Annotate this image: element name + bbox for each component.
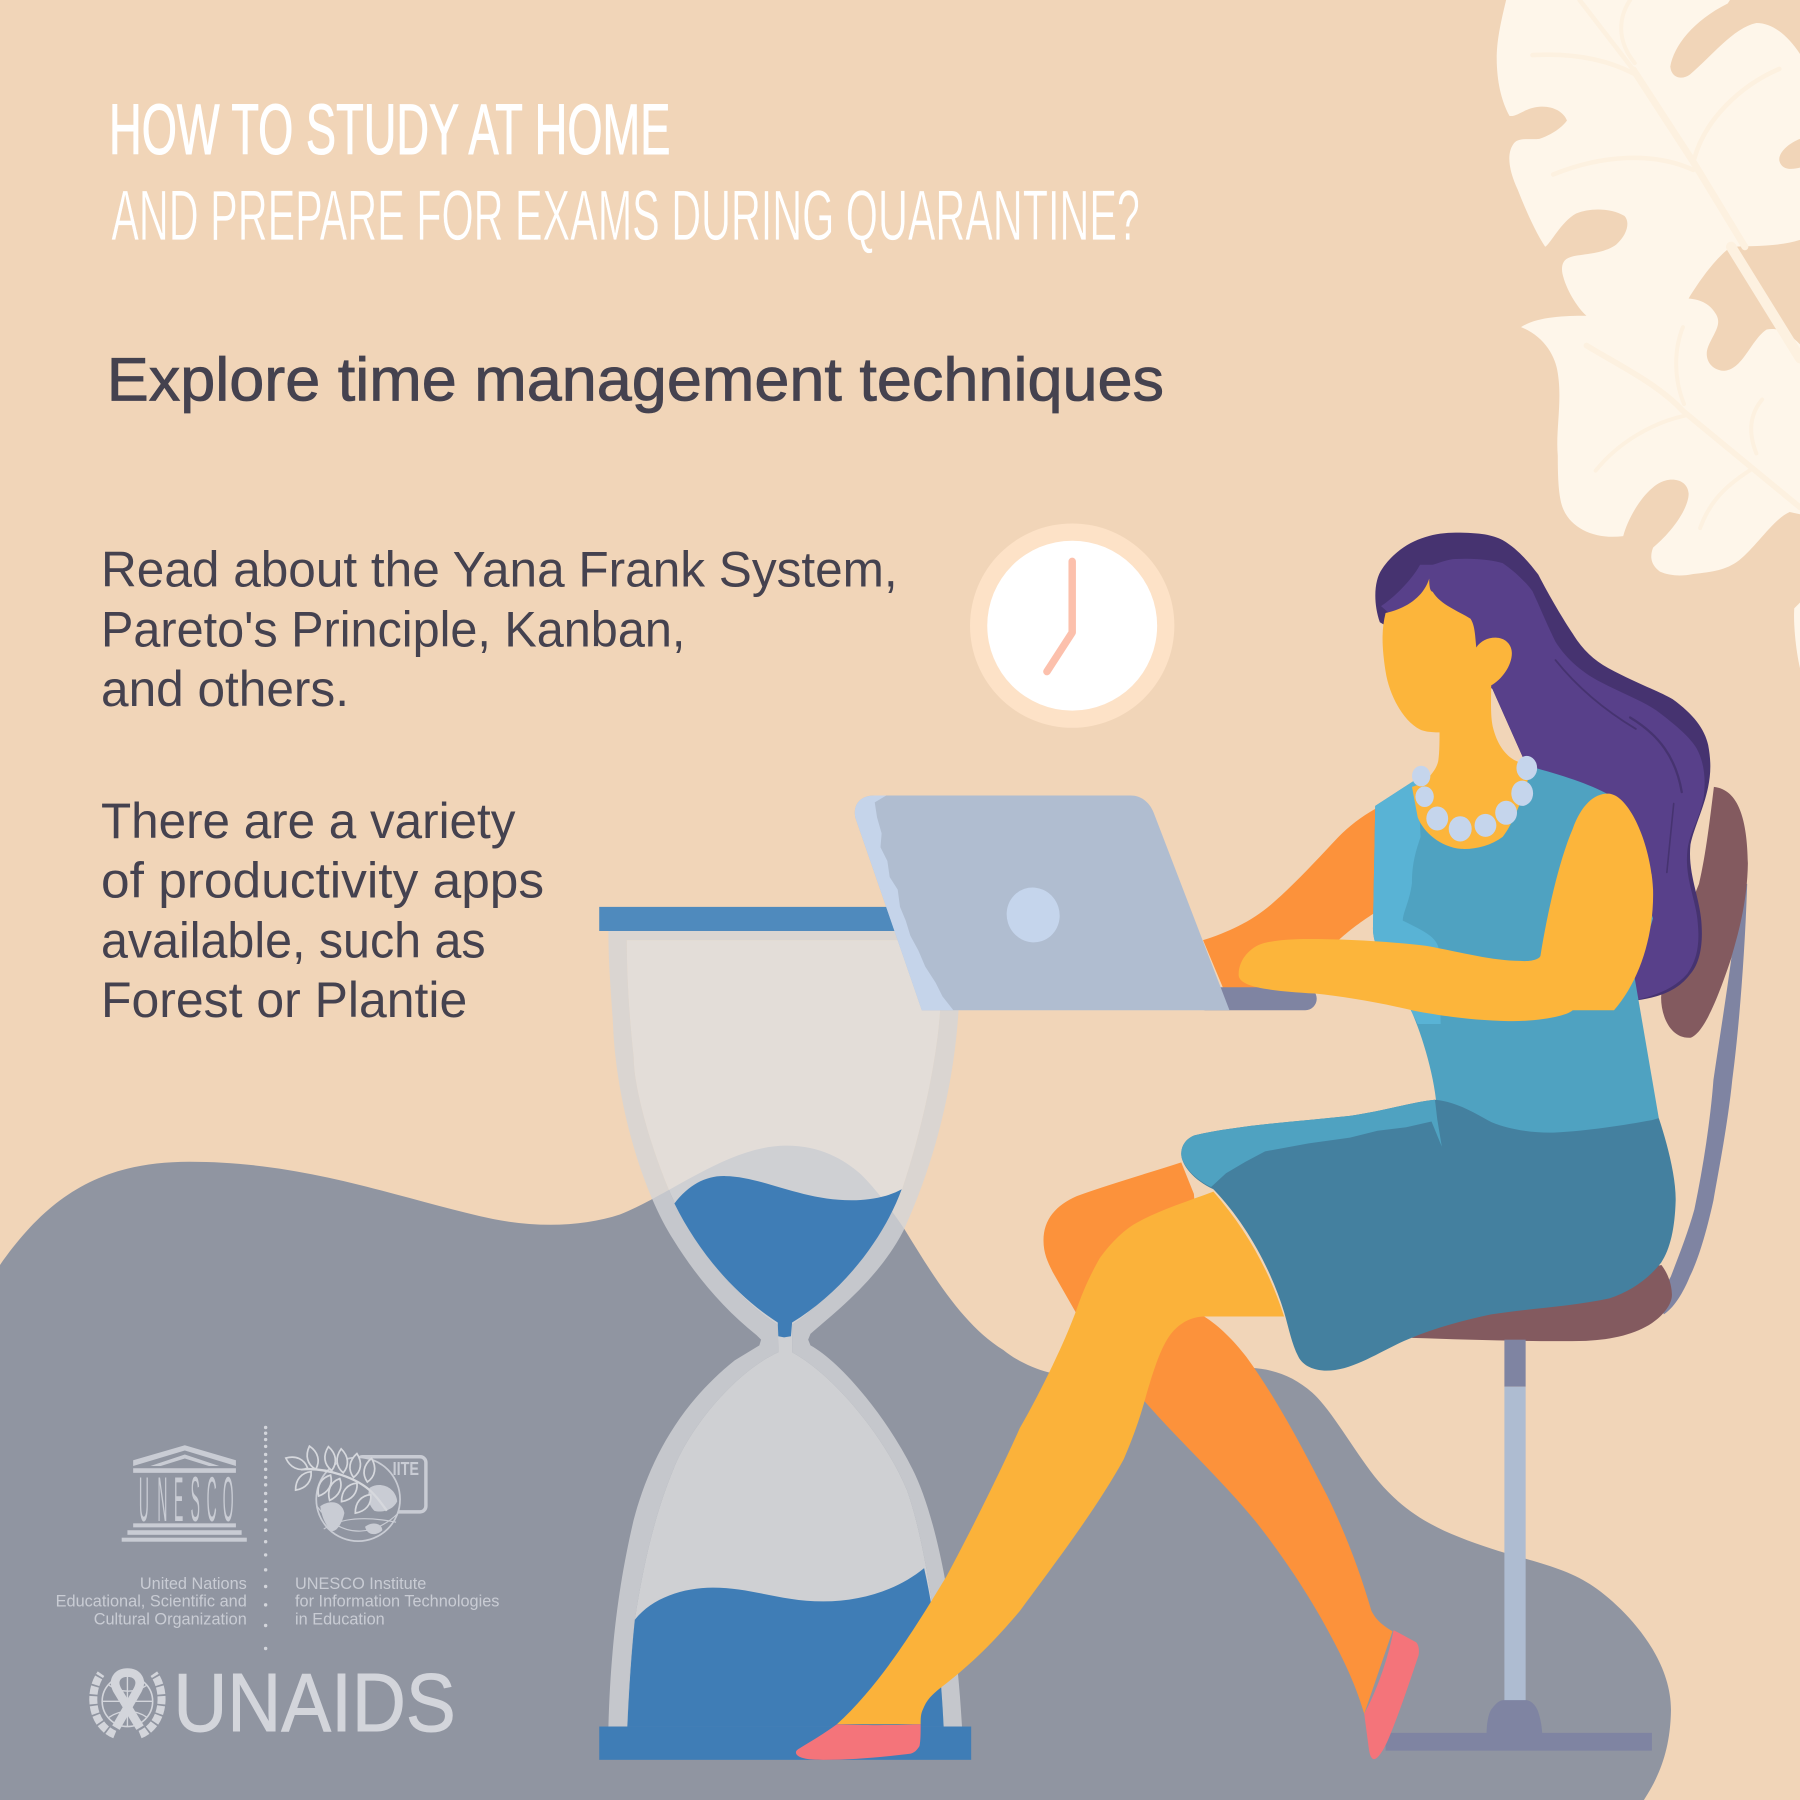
- heading: Explore time management techniques: [107, 346, 1164, 414]
- unesco caption: [56, 1575, 247, 1628]
- text block: apps and systems: Forest or Plantie: [101, 971, 467, 1028]
- iite caption: for Information Technologies: [295, 1593, 499, 1611]
- laptop: [855, 796, 1317, 1010]
- unesco caption: United Nations: [140, 1575, 247, 1593]
- decorative leaf: [1497, 0, 1800, 668]
- skirt: [1181, 1100, 1676, 1371]
- far arm: [1203, 808, 1376, 999]
- title: HOW TO STUDY AT HOME: [109, 91, 670, 170]
- grey wave background: [0, 1146, 1671, 1800]
- unesco caption: Cultural Organization: [94, 1610, 247, 1628]
- iite logo: IITE: [393, 1458, 419, 1479]
- unesco temple logo: [122, 1445, 247, 1542]
- text block: apps and systems: Pareto's Principle, Kanban,: [101, 600, 685, 657]
- iite caption: in Education: [295, 1610, 385, 1628]
- text block: apps and systems: There are a variety: [101, 792, 516, 849]
- hourglass: [599, 907, 971, 1760]
- unesco caption: Educational, Scientific and: [56, 1593, 247, 1611]
- text block: apps and systems: of productivity apps: [101, 852, 544, 909]
- head and neck: [1383, 579, 1531, 849]
- text block: apps and systems: available, such as: [101, 911, 486, 968]
- text block: apps and systems: Read about the Yana Frank System,: [101, 541, 898, 598]
- title: [109, 91, 1140, 256]
- text block: apps and systems: [101, 541, 898, 1028]
- divider dots: [264, 1427, 267, 1648]
- torso and dress: [1373, 767, 1659, 1148]
- unaids logo: UNAIDS: [173, 1656, 456, 1749]
- text block: apps and systems: and others.: [101, 660, 349, 717]
- iite logo: [284, 1445, 426, 1541]
- necklace: [1412, 756, 1537, 841]
- chair: [1386, 787, 1748, 1751]
- hair: [1375, 533, 1710, 1001]
- back leg: [1043, 1162, 1419, 1759]
- front leg: [796, 1192, 1284, 1760]
- unesco temple logo: UNESCO: [139, 1464, 234, 1535]
- clock: [970, 523, 1174, 728]
- iite caption: [295, 1575, 499, 1628]
- near arm: [1239, 794, 1653, 1021]
- iite caption: UNESCO Institute: [295, 1575, 426, 1593]
- logos: [56, 1427, 499, 1749]
